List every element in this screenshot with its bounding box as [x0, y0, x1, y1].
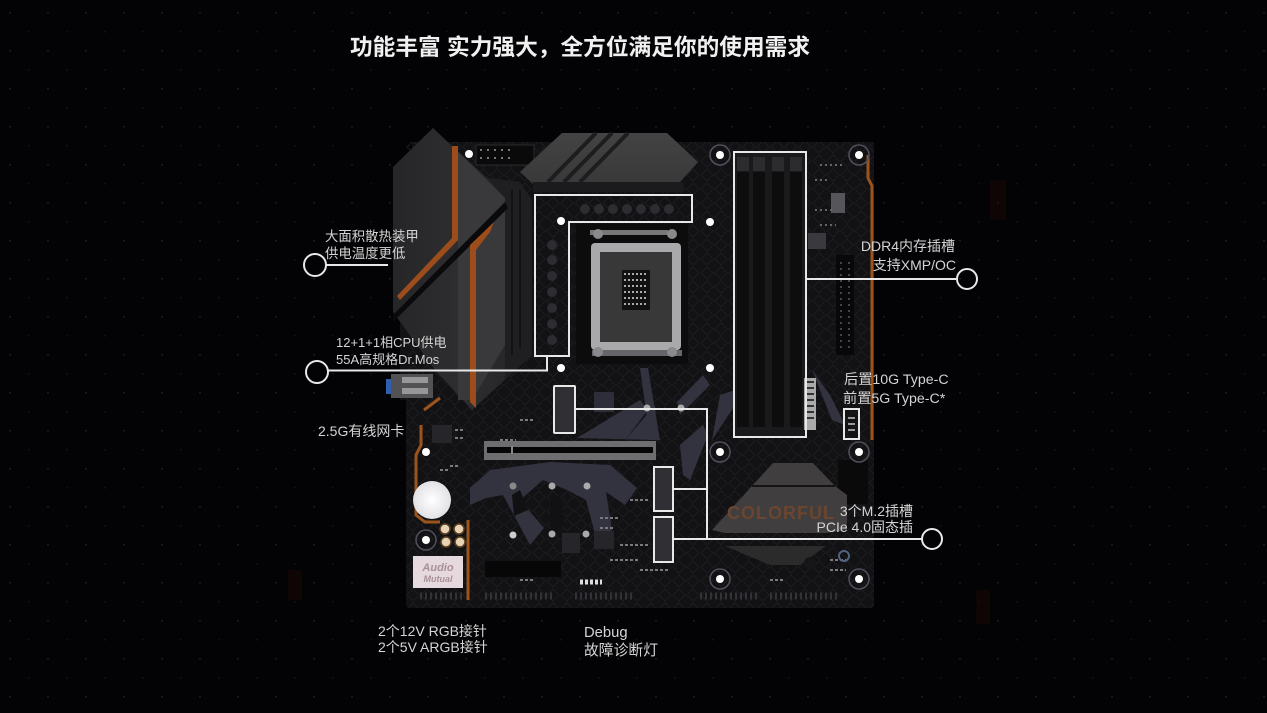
- callout: LAN: 2.5G有线网卡: [318, 423, 404, 439]
- battery: [413, 481, 451, 519]
- board PCB: [400, 142, 874, 608]
- RAM slots: [735, 153, 816, 436]
- COLORFUL logo: COLORFUL: [727, 503, 835, 523]
- mounting holes: [416, 145, 869, 589]
- lower PCIe slot: [485, 561, 561, 577]
- audio chip: Audio: [421, 562, 454, 574]
- rear I/O LAN port: [386, 374, 433, 398]
- audio chip: [413, 556, 463, 588]
- top heatsink: [520, 133, 698, 192]
- label: Debug: [584, 625, 658, 659]
- callout: heatsink armor: [304, 229, 419, 276]
- callout: DDR4 slots: DDR4内存插槽: [861, 238, 955, 254]
- callout: CPU power: 55A高规格Dr.Mos: [336, 352, 440, 367]
- components and chips: [420, 165, 868, 596]
- orange edge traces: [416, 155, 872, 600]
- callout: M.2 slots: PCIe 4.0固态插: [817, 519, 913, 535]
- callout: CPU power: [306, 195, 692, 383]
- callout: heatsink armor: 供电温度更低: [325, 246, 405, 261]
- label: Debug: Debug: [584, 625, 628, 641]
- left power heatsink: [393, 128, 532, 410]
- callout: DDR4 slots: 支持XMP/OC: [873, 257, 956, 273]
- VRM chokes: [547, 204, 674, 345]
- M.2 heatsink: [712, 463, 847, 569]
- board diamond texture: [406, 142, 874, 608]
- callout: M.2 slots: 3个M.2插槽: [840, 503, 913, 519]
- graffiti dark cut-outs: [512, 490, 565, 535]
- PCIe slot: [484, 441, 656, 460]
- callout: M.2 slots: [554, 386, 942, 562]
- graffiti beast artwork: [470, 368, 845, 545]
- callout: Type-C: 前置5G Type-C*: [843, 390, 946, 407]
- CPU socket: [576, 224, 688, 364]
- label: RGB headers: 2个12V RGB接针: [378, 623, 487, 639]
- motherboard: [386, 128, 874, 608]
- callout: Type-C: 后置10G Type-C: [844, 372, 949, 388]
- label: RGB headers: [378, 623, 488, 655]
- capacitors: [440, 524, 465, 547]
- callout: CPU power: 12+1+1相CPU供电: [336, 335, 447, 350]
- label: RGB headers: 2个5V ARGB接针: [378, 639, 488, 655]
- title: 功能丰富 实力强大，全方位满足你的使用需求: [350, 34, 810, 60]
- 24-pin and 8-pin power connectors: [476, 145, 854, 355]
- callout: Type-C: [843, 372, 949, 439]
- callout: DDR4 slots: [734, 152, 977, 437]
- label: Debug: 故障诊断灯: [584, 641, 658, 659]
- callout: heatsink armor: 大面积散热装甲: [325, 229, 419, 244]
- audio chip: Mutual: [424, 574, 453, 584]
- M.2 slots: [555, 387, 672, 561]
